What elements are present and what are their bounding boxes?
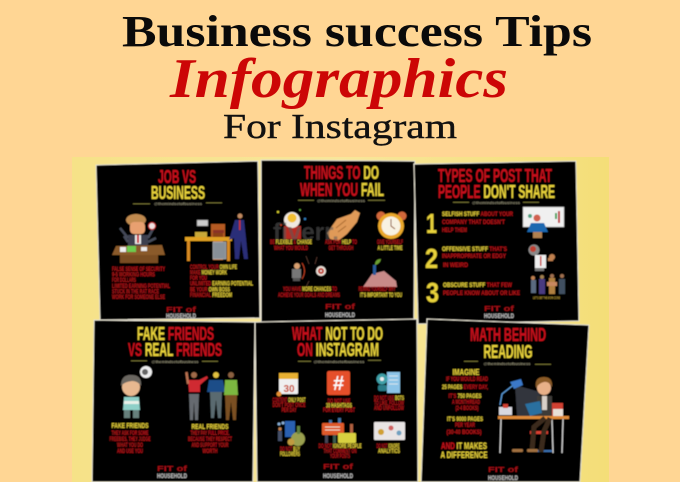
text: fake friends — [110, 423, 150, 455]
heading: PEOPLE DON'T SHARE — [438, 182, 555, 202]
tip 3: 3 — [426, 277, 439, 308]
illustration: group of people — [531, 274, 565, 300]
captions: AND UNFOLLOW — [374, 406, 404, 412]
icon: hashtag — [327, 371, 350, 395]
heading: business success tips: Business success Tips — [122, 7, 592, 56]
logo — [484, 306, 515, 320]
panel: fake friends vs real friends — [92, 320, 255, 482]
logo: HOUSEHOLD — [166, 314, 197, 320]
logo — [488, 467, 519, 482]
logo: FIT of — [157, 466, 188, 473]
captions — [272, 396, 404, 460]
captions: GET THROUGH — [328, 246, 354, 252]
text: fake friends: FREEBIES, THEY JUDGE — [110, 437, 150, 443]
captions: DO NOT USE — [328, 399, 350, 405]
captions: YOUR POSTS — [330, 454, 350, 460]
text: reading math: AND IT MAKES — [441, 441, 487, 451]
illustration: business owner at desk — [185, 214, 248, 261]
text: fake friends: AND USE YOU — [117, 449, 143, 455]
icon: hashtag: # — [333, 373, 344, 395]
handle — [453, 201, 539, 205]
illustration: real friends — [185, 372, 238, 420]
text: reading math: 25 PAGES EVERY DAY, — [442, 385, 488, 391]
handle — [298, 199, 385, 203]
captions: REMIND YOURSELF WHY — [358, 287, 396, 293]
heading: THINGS TO DO — [304, 163, 379, 183]
captions: DO NOT IGNORE — [376, 444, 400, 450]
captions: A LITTLE TIME — [378, 246, 402, 252]
text: reading math: A DIFFERENCE — [440, 450, 488, 460]
heading — [128, 324, 222, 360]
watermark: fiverr: fiverr. — [273, 219, 339, 246]
icon: analytics — [374, 422, 405, 440]
logo: FIT of — [323, 464, 354, 471]
logo — [166, 307, 197, 320]
logo: HOUSEHOLD — [488, 476, 519, 482]
text: reading math: PER YEAR — [455, 423, 475, 429]
tip 2: 2 — [425, 243, 438, 274]
captions: WHAT YOU WOULD — [274, 246, 308, 252]
text: fake friends: FAKE FRIENDS — [112, 423, 149, 430]
tip 1: SELFISH STUFF ABOUT YOUR — [442, 212, 514, 218]
heading — [438, 166, 555, 202]
icon: archer and target — [292, 256, 326, 287]
text: reading math: IT'S 9000 PAGES — [447, 417, 483, 423]
heading: WHAT NOT TO DO — [292, 324, 383, 344]
captions: IT'S IMPORTANT TO YOU — [360, 293, 402, 299]
heading: VS REAL FRIENDS — [128, 340, 222, 360]
icon: light bulb box — [277, 209, 306, 239]
captions: ASK FOR HELP TO — [325, 240, 357, 246]
icon: helping hand — [327, 210, 360, 241]
tip 3 — [426, 277, 520, 308]
illustration: stressed employee at desk — [112, 214, 165, 263]
captions: GIVE YOURSELF — [377, 240, 403, 246]
heading: JOB VS — [158, 167, 196, 187]
logo: HOUSEHOLD — [157, 474, 188, 480]
heading: FAKE FRIENDS — [137, 324, 214, 344]
handle — [298, 360, 381, 364]
text: real friends: THEY PAY FULL PRICE, — [190, 431, 230, 437]
heading — [151, 167, 205, 203]
heading: infographics: Infographics — [169, 48, 508, 110]
logo: HOUSEHOLD — [484, 314, 515, 320]
handle: @themindsetofbusiness — [317, 199, 365, 203]
heading — [292, 324, 383, 360]
text: job drawbacks: LIMITED EARNING POTENTIAL — [112, 284, 170, 290]
tip 2: IN WEIRD — [443, 263, 469, 269]
icon: buying followers — [278, 421, 305, 446]
yellow backdrop — [72, 157, 609, 482]
illustration: man reading at desk — [498, 377, 569, 453]
captions: THAT COMMENT ON — [324, 449, 356, 455]
tip 3: PEOPLE KNOW ABOUT OR LIKE — [443, 291, 520, 297]
logo: FIT of — [488, 467, 519, 474]
text: reading math: (2-4 BOOKS) — [456, 406, 478, 412]
icon: calendar — [276, 373, 298, 396]
handle: @themindsetofbusiness — [154, 202, 202, 206]
illustration: presenter with chart — [523, 207, 564, 238]
logo: FIT of — [484, 306, 515, 313]
logo — [323, 464, 354, 480]
text: business benefits — [190, 265, 253, 299]
logo: HOUSEHOLD — [325, 313, 356, 319]
text: real friends: WORTH — [202, 449, 218, 455]
handle: @themindsetofbusiness — [314, 360, 365, 364]
heading — [300, 163, 384, 200]
logo: HOUSEHOLD — [323, 474, 354, 480]
icon: comments people — [322, 418, 356, 443]
captions — [270, 240, 403, 299]
tip 1 — [426, 208, 514, 239]
text: job drawbacks — [112, 267, 170, 301]
text: job drawbacks: STUCK IN THE RAT RACE — [112, 290, 159, 296]
handle: @themindsetofbusiness — [152, 360, 199, 364]
panel: things to do when you fail — [261, 160, 415, 322]
captions: FOR EVERY POST — [323, 408, 355, 414]
captions: ANALYTICS — [378, 449, 400, 455]
heading: for instagram: For Instagram — [223, 107, 457, 146]
text: job drawbacks: 9-5 WORKING HOURS — [112, 272, 155, 278]
captions: DO NOT BUY — [280, 447, 300, 453]
captions: 30 HASHTAGS — [326, 404, 352, 410]
text: real friends — [188, 424, 232, 455]
tip 1: HELP THEM — [442, 228, 467, 234]
tip 1: COMPANY THAT DOESN'T — [442, 220, 505, 226]
text: real friends: AND SUPPORT YOUR — [192, 443, 229, 449]
captions: ACHIEVE YOUR GOALS AND DREAMS — [278, 293, 340, 299]
heading: WHEN YOU FAIL — [300, 180, 384, 200]
handle: @themindsetofbusiness — [484, 362, 531, 366]
heading: MATH BEHIND — [470, 325, 546, 345]
icon: bot and document — [376, 372, 400, 393]
handle: @themindsetofbusiness — [472, 201, 520, 205]
captions: YOU HAVE MORE CHANCES TO — [283, 287, 337, 293]
text: job drawbacks: FALSE SENSE OF SECURITY — [112, 267, 165, 273]
tip 3: OBSCURE STUFF THAT FEW — [443, 283, 512, 289]
captions: PER DAY — [282, 408, 296, 414]
panel: types of post that people don't share — [414, 161, 579, 324]
text: business benefits: FINANCIAL FREEDOM — [190, 293, 232, 299]
icon: alarm clock — [376, 212, 406, 239]
text: reading math: A MONTH/READ — [452, 400, 480, 406]
handle — [464, 361, 551, 366]
handle — [131, 360, 218, 364]
tip 2 — [425, 243, 507, 274]
captions: DO NOT USE BOTS — [374, 396, 404, 402]
handle — [133, 202, 222, 206]
panel: math behind reading — [421, 319, 589, 482]
illustration: angry man — [528, 244, 555, 271]
text: job drawbacks: FOR DOLLARS — [112, 278, 136, 284]
heading — [470, 325, 546, 362]
panel: what not to do on instagram — [255, 319, 418, 482]
captions: TO LIKE, FOLLOW — [374, 401, 404, 407]
captions: FOLLOWERS — [280, 452, 300, 458]
text: reading math: IT'S 750 PAGES — [448, 394, 482, 400]
illustration: fake friend — [121, 366, 152, 418]
logo — [157, 466, 188, 480]
text: real friends: REAL FRIENDS — [192, 424, 229, 431]
captions: DO NOT IGNORE PEOPLE — [318, 444, 362, 450]
captions: CONTENT ONLY POST — [272, 398, 306, 404]
logo — [325, 304, 356, 319]
tip 2: OFFENSIVE STUFF THAT'S — [442, 247, 507, 253]
panel: job vs business — [96, 161, 260, 320]
text: fake friends: WHAT YOU DO — [117, 443, 143, 449]
text: reading math — [440, 368, 488, 460]
text: fake friends: THEY ASK FOR SOME — [112, 431, 148, 437]
heading: READING — [484, 342, 532, 362]
text: business benefits: UNLIMITED EARNING POTENTIAL — [190, 282, 253, 288]
text: reading math: IF YOU WOULD READ — [446, 377, 488, 383]
text: reading math: IMAGINE — [452, 368, 480, 377]
text: business benefits: CONTROL YOUR OWN LIFE — [190, 265, 237, 271]
text: real friends: BECAUSE THEY RESPECT — [188, 437, 232, 443]
text: reading math: (30-40 BOOKS) — [446, 430, 482, 436]
logo: FIT of — [325, 304, 356, 311]
text: business benefits: BE YOUR OWN BOSS — [190, 288, 230, 294]
logo: FIT of — [166, 307, 197, 314]
tip 1: 1 — [426, 208, 437, 239]
text: business benefits: MAKE MONEY WORK — [190, 270, 227, 276]
icon: mountain and plant — [363, 259, 397, 287]
heading: TYPES OF POST THAT — [438, 166, 552, 186]
illustration: group of people: LET'S GET THE WORK DONE — [533, 296, 560, 300]
title — [122, 7, 592, 146]
heading: ON INSTAGRAM — [297, 340, 379, 360]
heading: BUSINESS — [151, 183, 205, 203]
icon: calendar: 30 — [283, 384, 295, 395]
tip 2: INAPPROPRIATE OR EDGY — [442, 254, 506, 260]
captions: DON'T POST ONCE — [272, 403, 306, 409]
captions: BE FLEXIBLE & CHANGE — [270, 240, 312, 246]
text: job drawbacks: WORK FOR SOMEONE ELSE — [112, 295, 165, 301]
text: business benefits: FOR YOU — [190, 276, 207, 282]
